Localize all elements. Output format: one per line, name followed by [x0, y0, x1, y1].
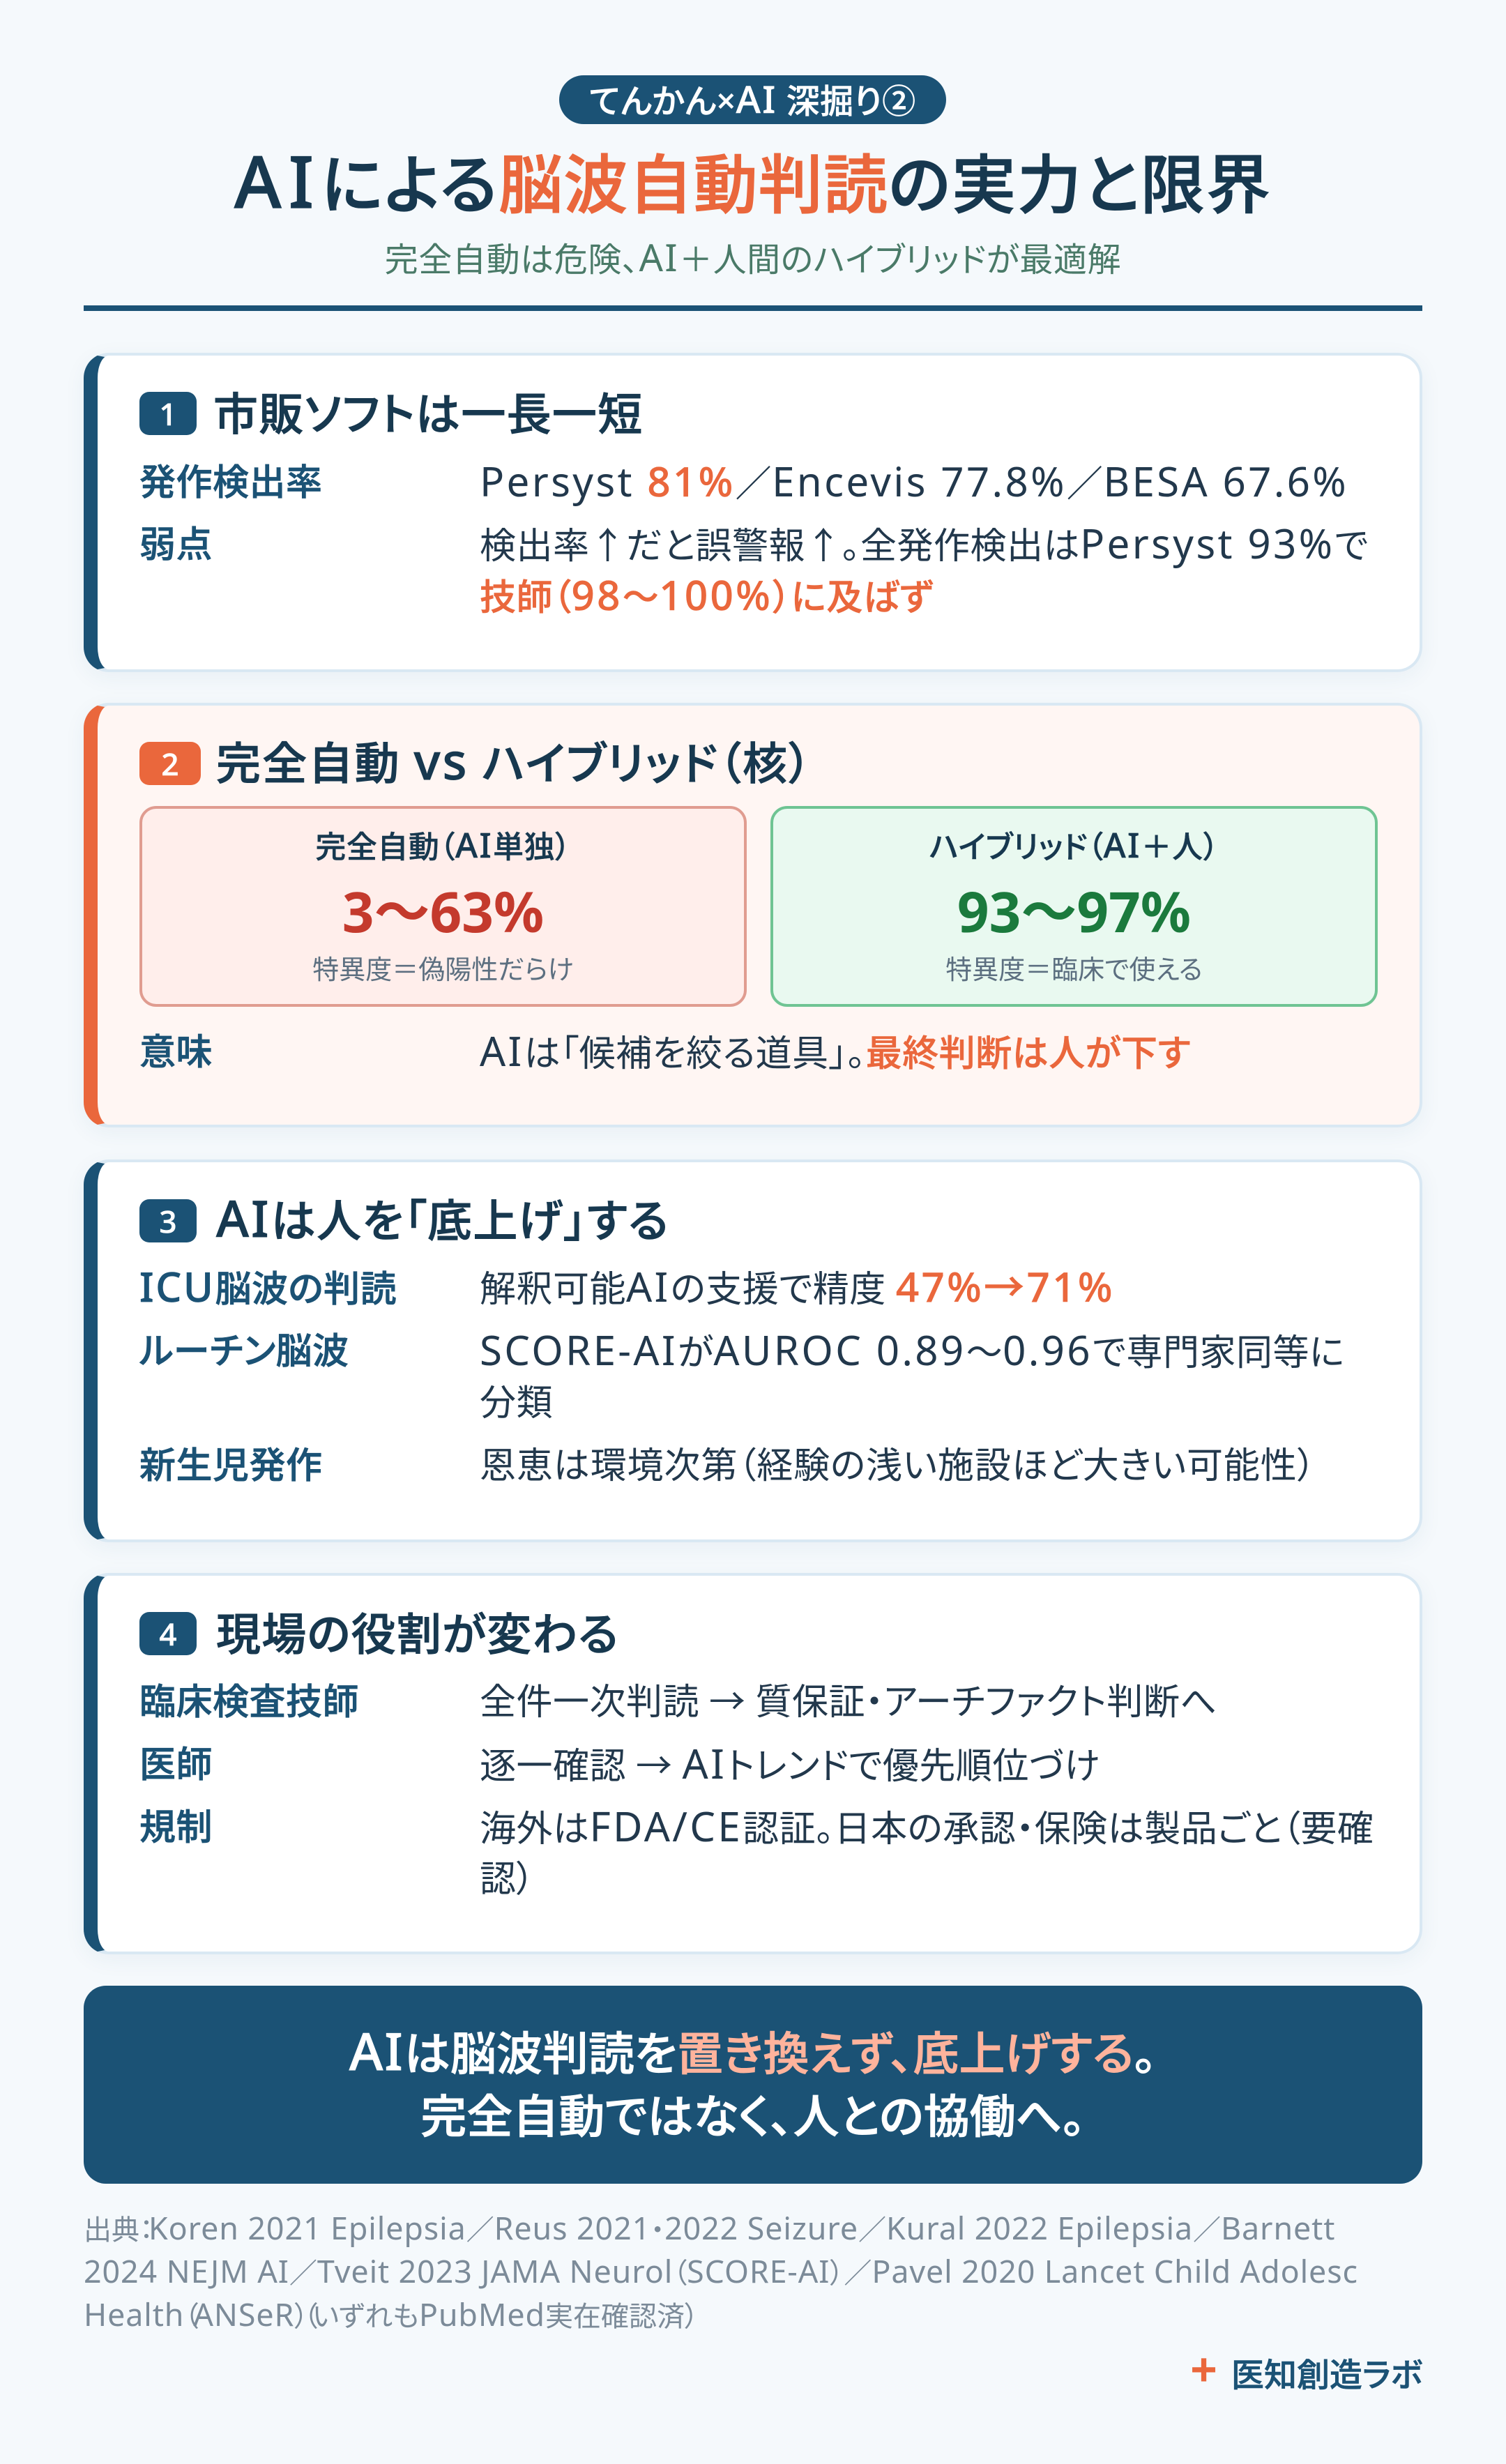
- conclusion banner: [84, 1986, 1422, 2184]
- panel: 1 commercial software: [84, 353, 1422, 672]
- row label: weakness: 弱点: [139, 519, 213, 568]
- heading 4: 現場の役割が変わる: [216, 1603, 619, 1664]
- row value: routine EEG: SCORE-AIがAUROC 0.89〜0.96で専門家同等に: [480, 1323, 1345, 1378]
- sources: 出典：Koren 2021 Epilepsia／Reus 2021・2022 Seizure／Kural 2022 Epilepsia／Barnett: [84, 2207, 1335, 2249]
- row label: meaning: 意味: [139, 1026, 213, 1076]
- header tag pill: てんかん×AI 深掘り②: [589, 73, 916, 124]
- badge 2: 2: [161, 743, 179, 784]
- row value: weakness: 技師（98〜100%）に及ばず: [480, 568, 934, 623]
- comparison box: full auto: [139, 806, 747, 1007]
- row value: technologist: 全件一次判読 → 質保証・アーチファクト判断へ: [480, 1676, 1217, 1726]
- box title: ハイブリッド（AI＋人）: [929, 821, 1219, 868]
- header rule: [84, 305, 1422, 311]
- row value: regulation: 認）: [480, 1853, 535, 1903]
- row label: routine EEG: ルーチン脳波: [139, 1325, 349, 1375]
- row label: neonatal: 新生児発作: [139, 1440, 323, 1489]
- row value: meaning: AIは「候補を絞る道具」。最終判断は人が下す: [480, 1024, 1191, 1079]
- row value: physician: 逐一確認 → AIトレンドで優先順位づけ: [480, 1736, 1100, 1791]
- heading 1: 市販ソフトは一長一短: [213, 383, 644, 443]
- badge 1: 1: [159, 393, 177, 434]
- row value: regulation: [480, 1799, 1374, 1903]
- heading 3: AIは人を「底上げ」する: [216, 1184, 669, 1252]
- row value: neonatal: 恩恵は環境次第（経験の浅い施設ほど大きい可能性）: [480, 1440, 1316, 1489]
- row label: technologist: 臨床検査技師: [139, 1676, 359, 1726]
- badge 1: [139, 392, 197, 435]
- badge 2: [139, 742, 201, 785]
- row value: weakness: 検出率↑だと誤警報↑。全発作検出はPersyst 93%で: [480, 516, 1369, 571]
- row value: weakness: [480, 516, 1369, 623]
- row value: ICU: 解釈可能AIの支援で精度 47%→71%: [480, 1259, 1115, 1314]
- row value: regulation: 海外はFDA/CE認証。日本の承認・保険は製品ごと（要確: [480, 1799, 1374, 1854]
- heading 2: 完全自動 vs ハイブリッド（核）: [216, 727, 812, 795]
- big number: 93〜97%: [957, 873, 1191, 949]
- conclusion banner: 完全自動ではなく、人との協働へ。: [420, 2084, 1086, 2147]
- comparison box: hybrid: [770, 806, 1378, 1007]
- sources: [84, 2207, 1358, 2336]
- row value: routine EEG: 分類: [480, 1377, 553, 1427]
- brand: + 医知創造ラボ: [1190, 2336, 1422, 2401]
- subtitle: 完全自動は危険、AI＋人間のハイブリッドが最適解: [385, 231, 1121, 282]
- box note: 特異度＝臨床で使える: [945, 951, 1203, 987]
- badge 3: 3: [159, 1200, 177, 1242]
- row value: detection rate: Persyst 81%／Encevis 77.8%／BESA 67.6%: [480, 454, 1348, 509]
- big number: 3〜63%: [342, 873, 544, 949]
- panel: 4 changing roles: [84, 1573, 1422, 1954]
- badge 3: [139, 1199, 197, 1242]
- box title: 完全自動（AI単独）: [315, 821, 571, 868]
- panel: 3 AI raises human level: [84, 1159, 1422, 1542]
- title: AIによる脳波自動判読の実力と限界: [234, 132, 1272, 229]
- sources: Health（ANSeR）（いずれもPubMed実在確認済）: [84, 2293, 699, 2336]
- badge 4: [139, 1612, 197, 1655]
- row label: detection rate: 発作検出率: [139, 457, 323, 506]
- row label: physician: 医師: [139, 1739, 213, 1788]
- sources: 2024 NEJM AI／Tveit 2023 JAMA Neurol（SCORE-AI）／Pavel 2020 Lancet Child Adolesc: [84, 2250, 1358, 2292]
- conclusion banner: AIは脳波判読を置き換えず、底上げする。: [349, 2015, 1157, 2085]
- row label: regulation: 規制: [139, 1802, 213, 1851]
- badge 4: 4: [159, 1613, 177, 1655]
- row value: routine EEG: [480, 1323, 1345, 1427]
- box note: 特異度＝偽陽性だらけ: [312, 951, 574, 987]
- row label: ICU: ICU脳波の判読: [139, 1259, 397, 1314]
- panel: 2 full auto vs hybrid: [84, 703, 1422, 1127]
